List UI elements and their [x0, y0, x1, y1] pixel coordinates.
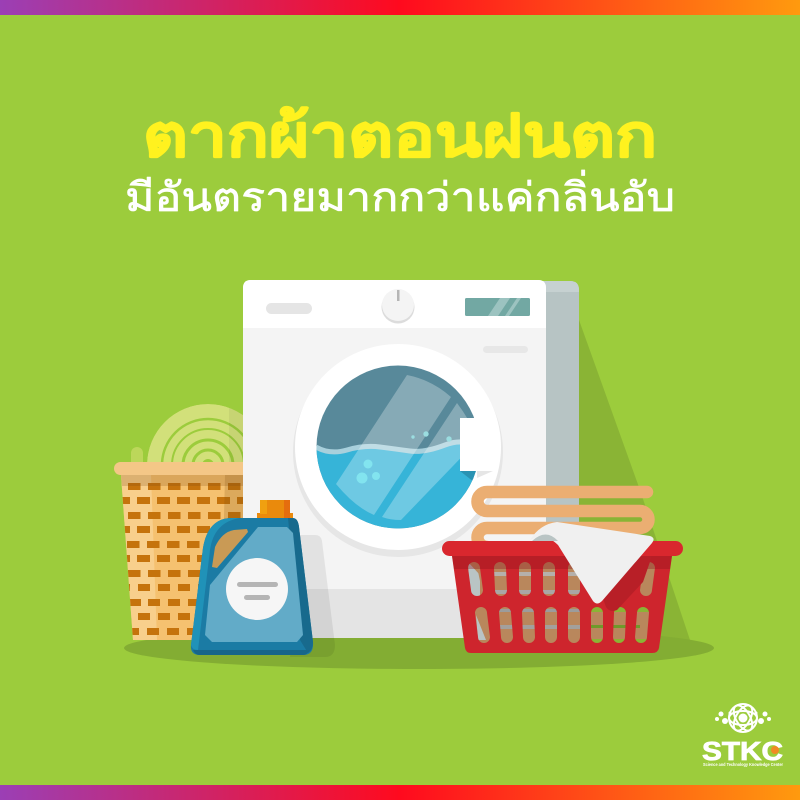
icon: dial	[382, 289, 414, 324]
water	[316, 442, 480, 530]
door ring	[295, 344, 501, 550]
washing machine	[243, 280, 580, 638]
left grey bit in first slot	[468, 562, 484, 600]
detergent bottle	[191, 500, 335, 657]
top gradient bar	[0, 0, 800, 15]
basket rim	[114, 462, 249, 475]
washer cast shadow	[579, 320, 690, 640]
bottle label panel	[205, 527, 303, 642]
water surface line	[316, 442, 480, 452]
icon: rolled towel	[131, 404, 243, 462]
cloth shadow	[600, 556, 652, 611]
glass reflection	[336, 375, 478, 520]
basket rim	[442, 541, 683, 556]
door glass and water	[316, 366, 476, 528]
bottle handle hole	[212, 529, 248, 568]
bottle body	[191, 518, 313, 655]
washer front	[243, 280, 546, 638]
stripes seen through slots	[490, 572, 590, 576]
icon: atom particles	[715, 712, 771, 724]
folded towels	[478, 492, 648, 547]
washer control panel	[243, 280, 546, 328]
door shadow	[293, 347, 503, 557]
STKC logo	[702, 702, 783, 767]
grey cloth fold	[532, 534, 558, 541]
icon: display	[465, 298, 530, 316]
basket rim shadow	[452, 556, 672, 569]
bottle cap	[257, 500, 293, 519]
icon: button pill	[266, 303, 312, 314]
washer side panel	[543, 281, 579, 522]
logo wordmark: STKC	[702, 736, 783, 766]
red laundry basket with towels	[442, 492, 683, 653]
basket weave	[122, 483, 243, 635]
door handle	[460, 418, 493, 478]
title	[125, 104, 675, 220]
icon: small slot	[483, 346, 528, 353]
red basket body with slots	[452, 556, 672, 653]
icon: atom	[729, 702, 757, 734]
wicker laundry basket with rolled towel	[114, 404, 243, 640]
bottle left highlight	[191, 518, 240, 650]
handle shadow on glass	[460, 471, 476, 480]
washer lower panel	[243, 589, 546, 638]
subheading: white line: มีอันตรายมากกว่าแค่กลิ่นอับ	[125, 170, 675, 220]
bottle round label	[226, 558, 288, 620]
basket inner shadow	[121, 475, 243, 486]
white cloth	[530, 522, 654, 604]
floor shadow	[124, 627, 714, 669]
bottle floor shadow	[290, 535, 335, 657]
bottom gradient bar	[0, 785, 800, 800]
bottle side shading	[288, 518, 313, 653]
basket back fill seen through slots	[456, 556, 668, 648]
basket highlight	[121, 475, 157, 640]
basket body	[121, 475, 243, 640]
logo orange dot	[771, 746, 779, 754]
logo tagline: Science and Technology Knowledge Center	[703, 762, 783, 767]
bubbles	[356, 460, 380, 484]
heading: yellow headline: ตากผ้าตอนฝนตก	[143, 104, 657, 169]
